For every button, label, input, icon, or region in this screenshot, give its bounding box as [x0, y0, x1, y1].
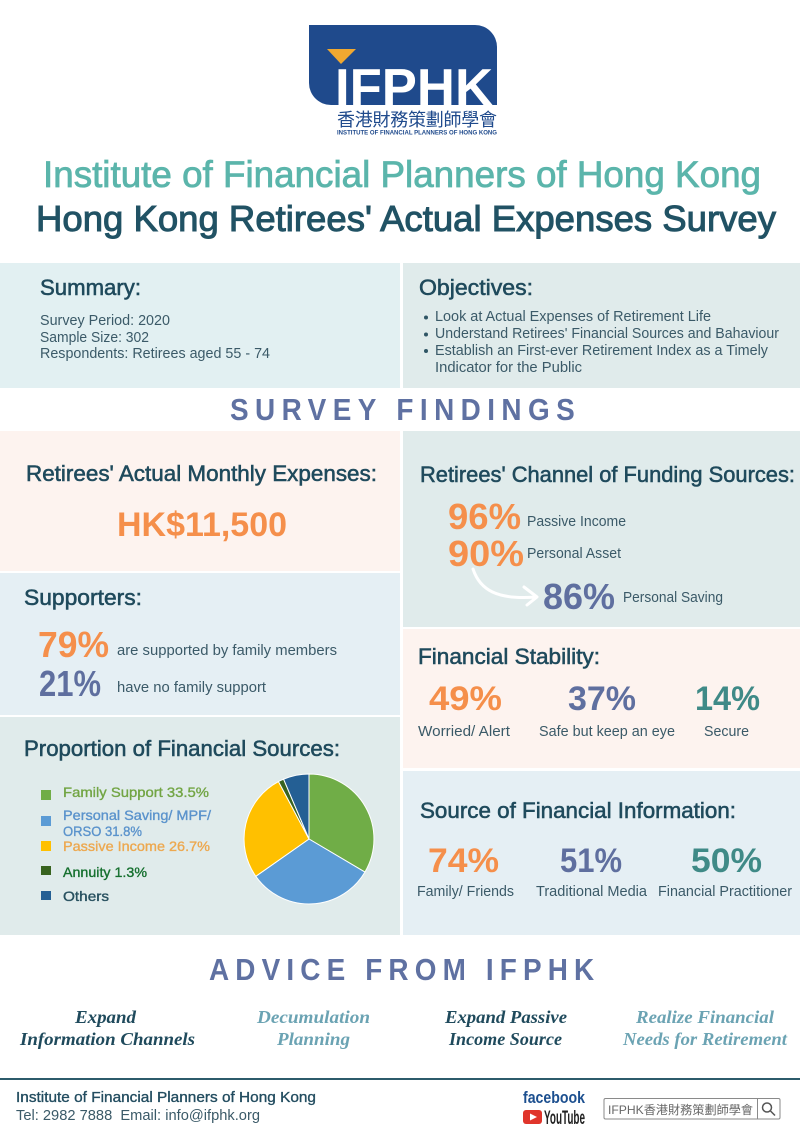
panel: source of financial information: Family/ Friends: [417, 884, 514, 900]
panel: objectives: Look at Actual Expenses of Retirement Life: [435, 309, 711, 325]
panel: financial stability: Financial Stability:: [418, 644, 600, 669]
advice: realize financial needs: Needs for Retirement: [622, 1029, 788, 1049]
panel: funding sources: [403, 431, 800, 627]
advice: realize financial needs: [622, 1007, 788, 1049]
panel: supporters: 21%: [39, 663, 101, 704]
panel: objectives: Establish an First-ever Retirement Index as a Timely: [435, 343, 769, 359]
footer contact: Institute of Financial Planners of Hong Kong: [16, 1089, 316, 1106]
chart legend: Personal Saving/ MPF/: [63, 807, 211, 823]
panel: monthly expenses: Retirees' Actual Monthly Expenses:: [26, 461, 377, 486]
panel: financial stability: [403, 629, 800, 768]
advice: decumulation planning: Decumulation: [256, 1007, 370, 1027]
panel: financial stability: 37%: [568, 680, 636, 718]
search box: IFPHK香港財務策劃師學會: [608, 1102, 753, 1117]
panel: source of financial information: 51%: [560, 842, 622, 880]
panel: summary: [0, 263, 400, 388]
panel: objectives: Objectives:: [419, 275, 533, 300]
panel: source of financial information: Source of Financial Information:: [420, 798, 736, 823]
panel: financial stability: 49%: [429, 680, 502, 718]
panel: funding sources: 86%: [543, 576, 615, 617]
panel: source of financial information: Financial Practitioner: [658, 884, 792, 900]
logo: 香港財務策劃師學會: [337, 106, 497, 132]
panel: summary: Summary:: [40, 275, 141, 300]
heading: survey findings: SURVEY FINDINGS: [230, 393, 575, 427]
chart legend: Passive Income 26.7%: [63, 838, 210, 854]
logo: IFPHK: [335, 59, 493, 117]
panel: summary: Respondents: Retirees aged 55 - 74: [40, 346, 270, 362]
panel: funding sources: 90%: [448, 533, 524, 574]
panel: supporters: have no family support: [117, 680, 266, 696]
panel: financial stability: 14%: [695, 680, 760, 718]
panel: proportion of financial sources: Proportion of Financial Sources:: [24, 736, 340, 761]
panel: funding sources: Personal Saving: [623, 590, 723, 606]
panel: funding sources: Retirees' Channel of Funding Sources:: [420, 462, 795, 487]
icon: facebook: facebook: [523, 1088, 585, 1107]
title: Hong Kong Retirees' Actual Expenses Survey: [36, 198, 776, 239]
title: [36, 154, 776, 239]
footer contact: Tel: 2982 7888 Email: info@ifphk.org: [16, 1107, 260, 1124]
chart legend: [41, 784, 211, 904]
panel: summary: Survey Period: 2020: [40, 313, 170, 329]
panel: source of financial information: Traditional Media: [536, 884, 648, 900]
panel: objectives: [403, 263, 800, 388]
panel: financial stability: Safe but keep an eye: [539, 724, 675, 740]
search box: [604, 1098, 780, 1119]
logo: [309, 25, 497, 136]
advice: expand information channels: Expand: [74, 1007, 137, 1027]
panel: proportion of financial sources: [0, 717, 400, 935]
footer contact: [16, 1089, 316, 1124]
panel: financial stability: Secure: [704, 724, 749, 740]
chart legend: Annuity 1.3%: [63, 864, 147, 880]
arrow: [473, 569, 537, 605]
logo: INSTITUTE OF FINANCIAL PLANNERS OF HONG KONG: [337, 130, 497, 136]
panel: supporters: are supported by family members: [117, 643, 337, 659]
advice: expand passive income source: [444, 1007, 567, 1049]
icon: youtube: [523, 1108, 585, 1129]
advice: expand information channels: Information Channels: [19, 1029, 195, 1049]
panel: objectives: Understand Retirees' Financial Sources and Bahaviour: [435, 326, 779, 342]
panel: supporters: Supporters:: [24, 585, 142, 610]
heading: advice from ifphk: ADVICE FROM IFPHK: [209, 953, 595, 987]
panel: funding sources: 96%: [448, 496, 521, 537]
advice: expand passive income source: Income Source: [448, 1029, 562, 1049]
chart legend: Family Support 33.5%: [63, 784, 209, 800]
pie chart: [244, 774, 374, 904]
icon: youtube: YouTube: [544, 1108, 585, 1129]
panel: objectives: Indicator for the Public: [435, 360, 582, 376]
panel: funding sources: Personal Asset: [527, 546, 621, 562]
panel: monthly expenses: [0, 431, 400, 571]
panel: monthly expenses: HK$11,500: [117, 506, 287, 544]
panel: source of financial information: 74%: [428, 842, 499, 880]
icon: magnifier: [762, 1103, 775, 1116]
panel: supporters: 79%: [38, 624, 109, 665]
panel: financial stability: Worried/ Alert: [418, 724, 510, 740]
title: Institute of Financial Planners of Hong Kong: [43, 154, 761, 195]
advice: decumulation planning: Planning: [276, 1029, 350, 1049]
advice: expand passive income source: Expand Passive: [444, 1007, 567, 1027]
panel: source of financial information: 50%: [691, 842, 762, 880]
panel: supporters: [0, 573, 400, 715]
panel: source of financial information: [403, 771, 800, 935]
panel: funding sources: Passive Income: [527, 514, 626, 530]
advice: realize financial needs: Realize Financial: [635, 1007, 774, 1027]
chart legend: Others: [63, 888, 109, 904]
panel: summary: Sample Size: 302: [40, 330, 149, 346]
advice: decumulation planning: [256, 1007, 370, 1049]
chart legend: ORSO 31.8%: [63, 823, 142, 839]
advice: expand information channels: [19, 1007, 195, 1049]
